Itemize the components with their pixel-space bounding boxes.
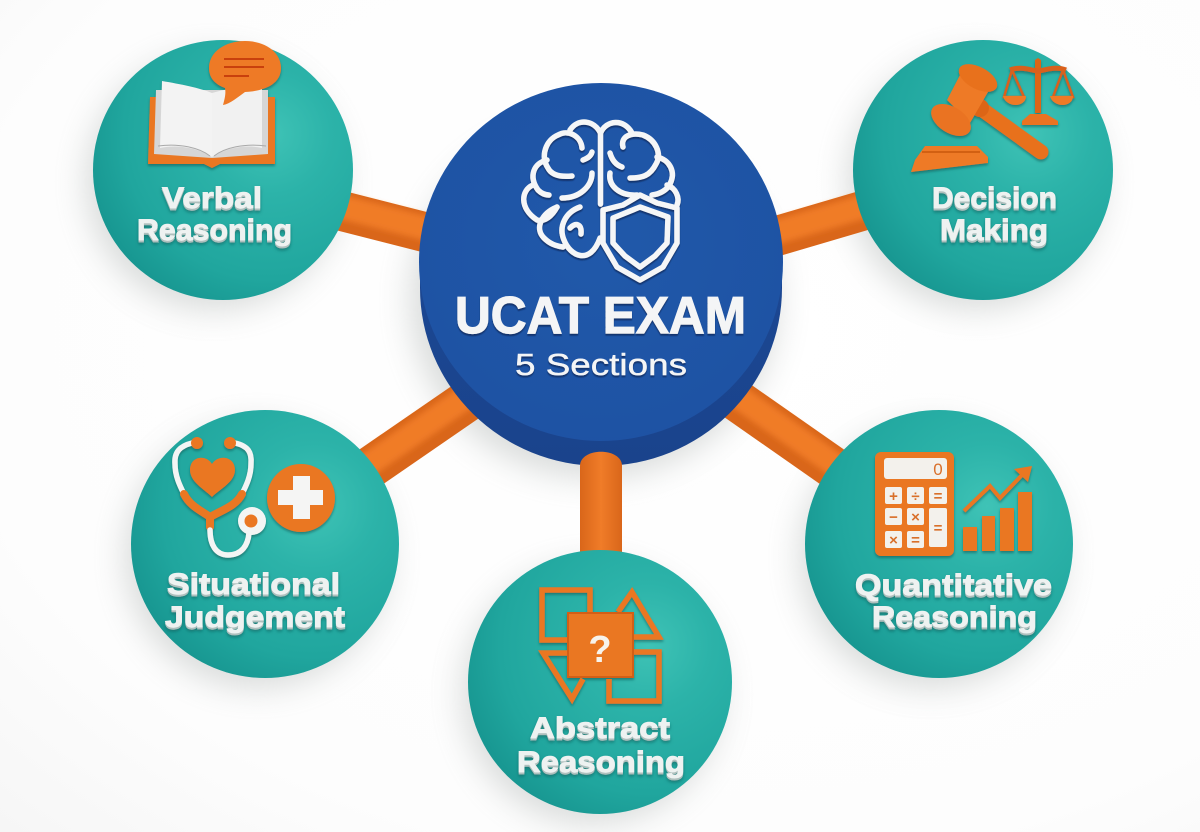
subtitle: 5 Sections (515, 347, 687, 382)
icon: calculator and growth chart (875, 452, 1032, 556)
icon: calculator and growth chart: ÷ (911, 488, 920, 505)
label (517, 712, 685, 779)
label: Quantitative (855, 569, 1052, 602)
label: Verbal (162, 182, 262, 215)
title: UCAT EXAM (455, 287, 746, 345)
label: Decision (932, 182, 1057, 215)
icon: calculator and growth chart: + (889, 488, 898, 505)
icon: calculator and growth chart: = (934, 488, 943, 505)
label (137, 182, 292, 247)
label (932, 182, 1057, 247)
icon: gavel and scales (911, 58, 1073, 172)
icon: calculator and growth chart: × (889, 532, 898, 549)
icon: stethoscope with heart and medical cross (175, 437, 335, 555)
label: Abstract (530, 712, 670, 745)
icon: calculator and growth chart: = (934, 520, 943, 537)
panel: situational judgement (131, 410, 399, 678)
label (855, 569, 1052, 634)
icon: open book with speech bubble (148, 41, 281, 168)
icon: brain and shield (524, 122, 678, 280)
label (165, 568, 345, 634)
panel: decision making (853, 40, 1113, 300)
icon: calculator and growth chart: × (911, 509, 920, 526)
label: Situational (167, 568, 340, 601)
connector: abstract reasoning (580, 452, 622, 562)
icon: shapes around question mark (542, 590, 659, 701)
soft shadows (86, 54, 1103, 824)
label: Judgement (165, 601, 345, 634)
connector: verbal reasoning (330, 204, 440, 236)
connector: situational judgement (353, 389, 480, 478)
icon: calculator and growth chart: 0 (933, 460, 943, 479)
icon: calculator and growth chart: − (889, 509, 898, 526)
connector: quantitative reasoning (725, 389, 850, 478)
panel: abstract reasoning (468, 550, 732, 814)
question mark: ? (588, 629, 612, 671)
connector: decision making (770, 204, 872, 238)
label: Reasoning (872, 601, 1037, 634)
label: Making (940, 214, 1048, 247)
panel: quantitative reasoning (805, 410, 1073, 678)
label: Reasoning (517, 746, 685, 779)
icon: calculator and growth chart: = (911, 532, 920, 549)
label: Reasoning (137, 214, 292, 247)
central disc (419, 83, 783, 466)
panel: verbal reasoning (93, 40, 353, 300)
